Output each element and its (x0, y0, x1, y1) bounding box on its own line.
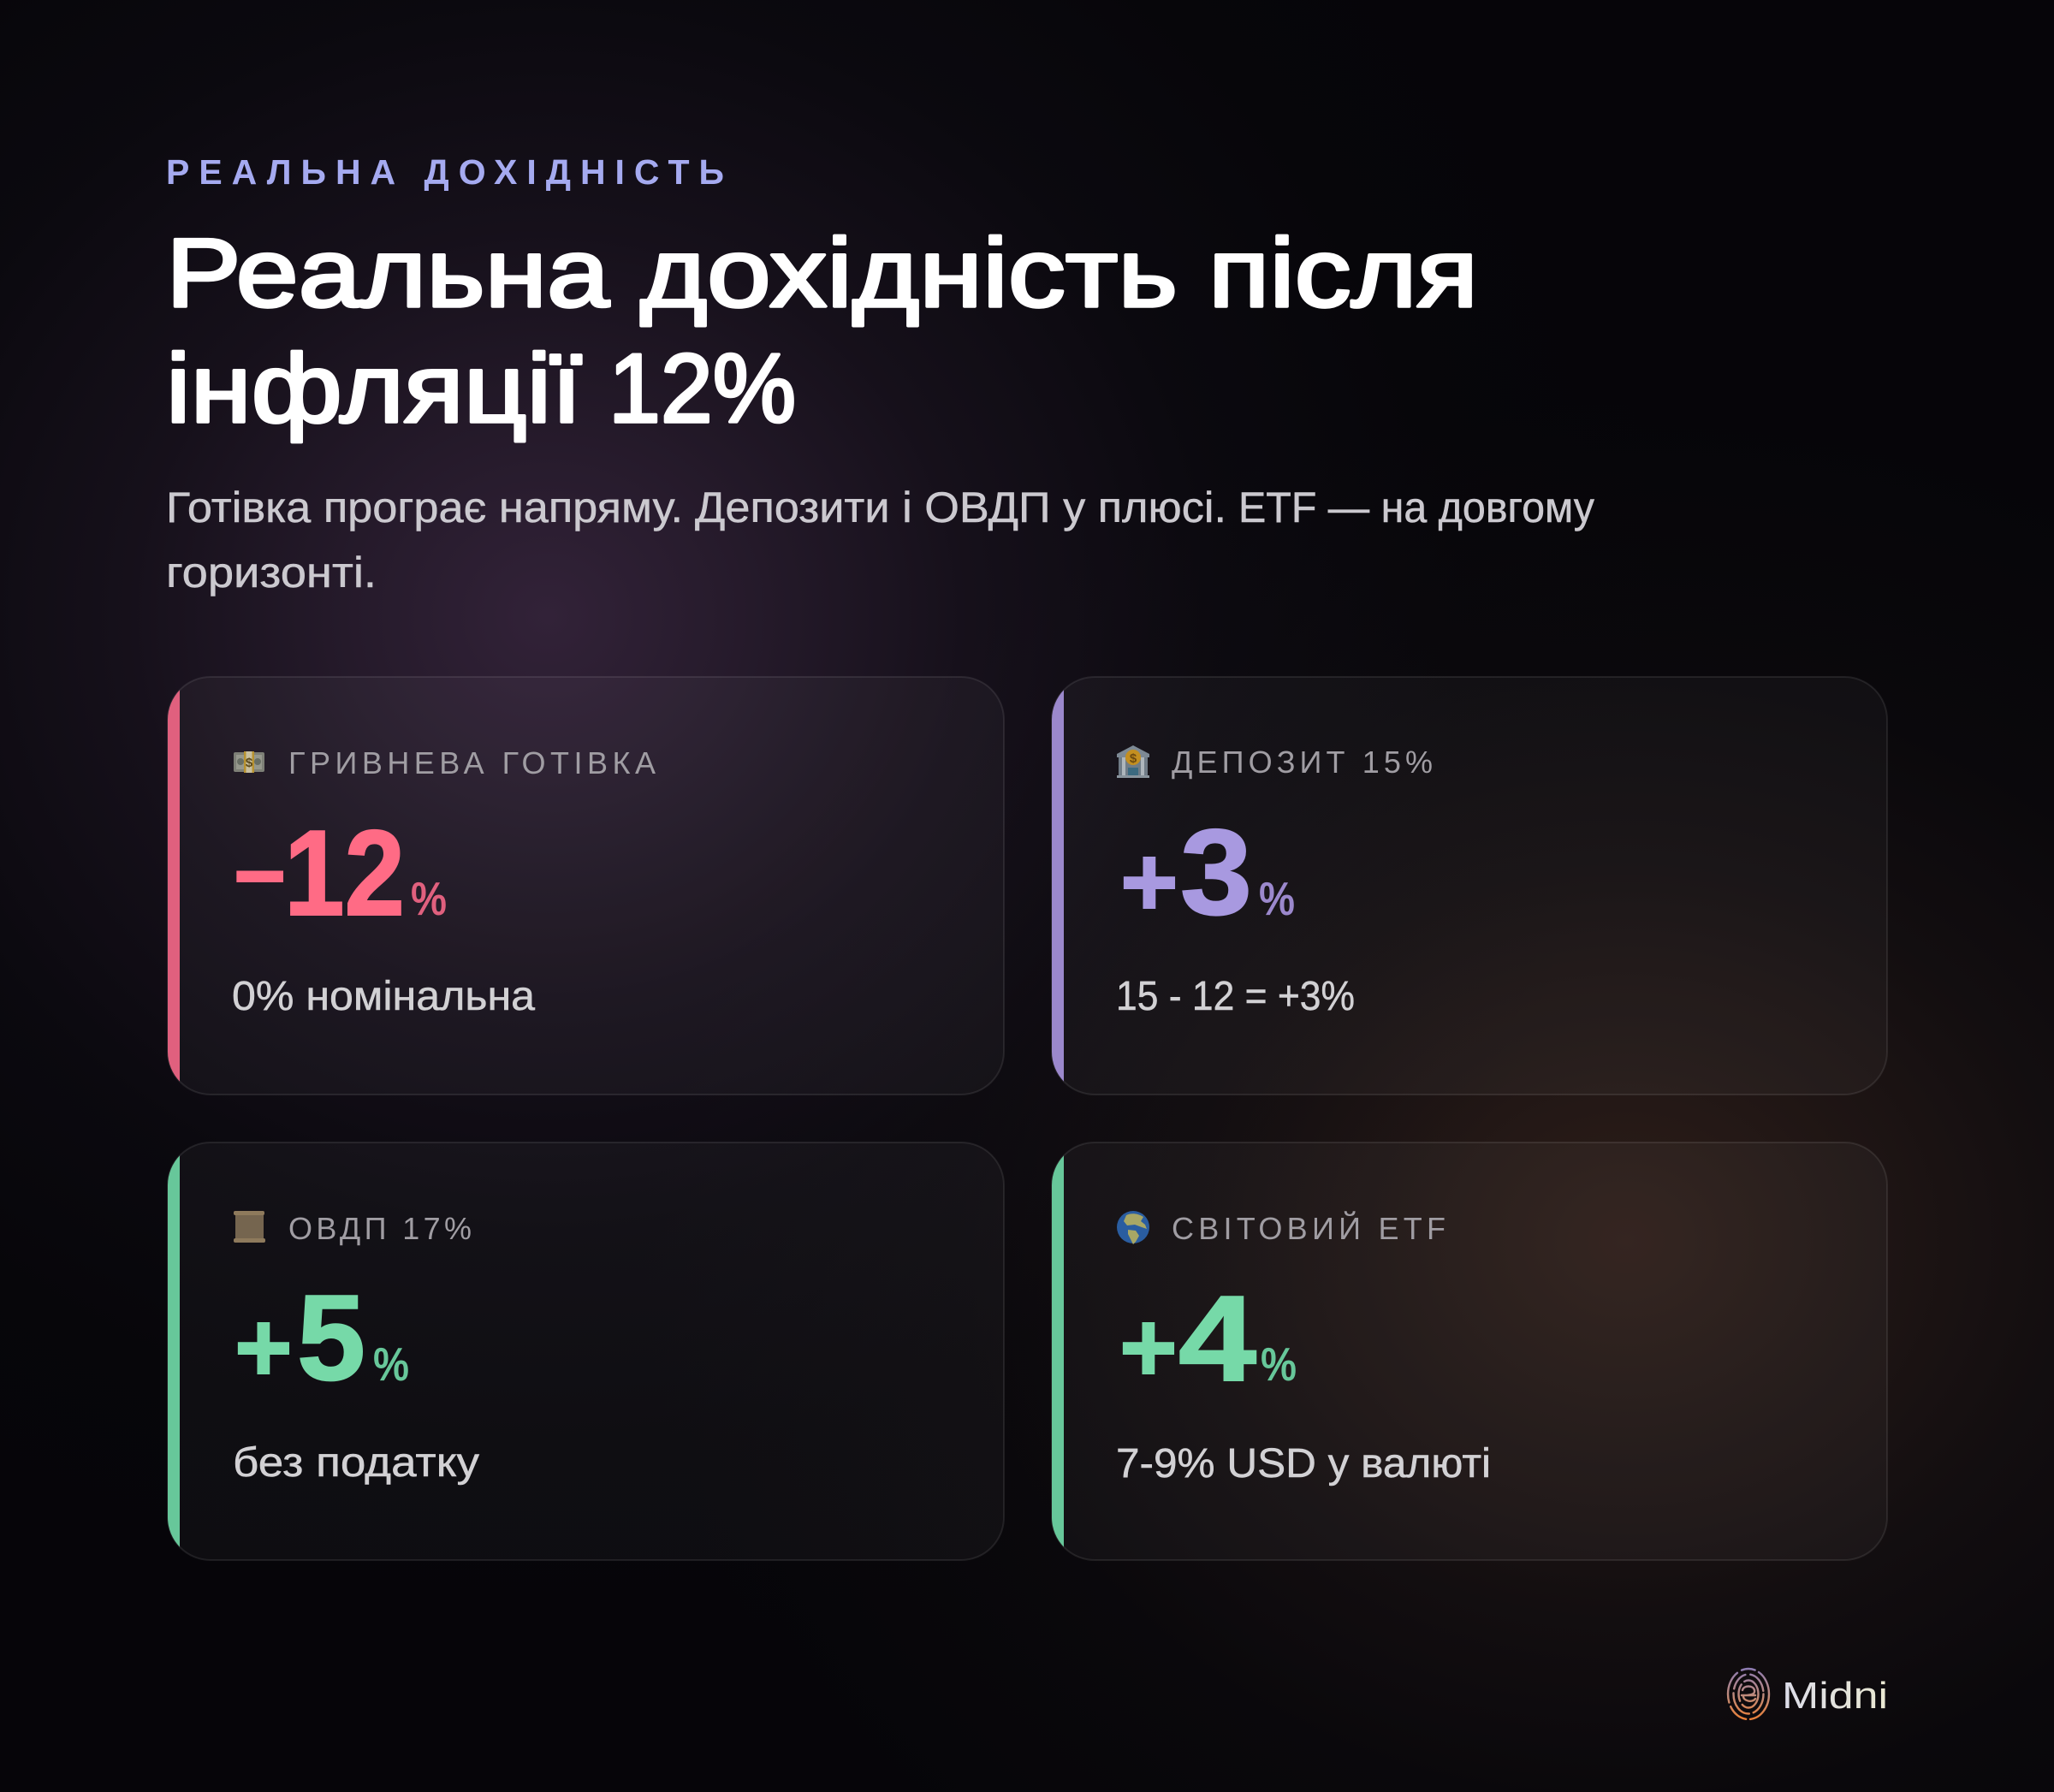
value (1119, 1271, 1297, 1407)
title: 12% (608, 335, 796, 443)
title: дохідність (640, 219, 1178, 328)
value: 5 (297, 1270, 365, 1406)
value (1120, 804, 1295, 941)
icon: bank: $ (1130, 751, 1137, 766)
value: 12 (284, 805, 405, 941)
value: + (234, 1291, 293, 1403)
icon: fingerprint (1728, 1669, 1769, 1719)
value: 3 (1180, 804, 1252, 941)
value: − (234, 826, 286, 926)
value: + (1119, 1291, 1178, 1403)
panel: депозит (1052, 677, 1887, 1095)
value (234, 1270, 409, 1406)
title: інфляції (166, 335, 582, 443)
description: 15 - 12 = +3% (1116, 974, 1355, 1019)
value: % (373, 1338, 409, 1391)
icon: banknote (234, 751, 264, 773)
panel: овдп (168, 1142, 1004, 1560)
icon: globe (1117, 1211, 1149, 1244)
subtitle: ETF — на довгому (1238, 484, 1594, 531)
accent bar: red (168, 677, 180, 1095)
accent bar: violet (1052, 677, 1064, 1095)
title: після (1208, 219, 1478, 328)
accent bar: green (1052, 1142, 1064, 1560)
subtitle (166, 484, 1594, 596)
label: СВІТОВИЙ ETF (1172, 1210, 1446, 1246)
value: + (1120, 826, 1178, 937)
label: ГРИВНЕВА ГОТІВКА (288, 745, 656, 780)
subtitle: Депозити і ОВДП у плюсі. (695, 484, 1226, 531)
wordmark: Midni (1782, 1675, 1888, 1717)
icon: scroll (234, 1211, 265, 1243)
subtitle: Готівка програє напряму. (166, 484, 683, 531)
value: % (1259, 872, 1295, 925)
description: 7-9% USD у валюті (1116, 1441, 1491, 1486)
panel: гривнева готівка (168, 677, 1004, 1095)
title (166, 219, 1478, 443)
value: % (411, 872, 447, 925)
panel: світовий etf (1052, 1142, 1887, 1560)
value: 4 (1178, 1271, 1256, 1407)
eyebrow label: РЕАЛЬНА ДОХІДНІСТЬ (166, 152, 724, 192)
value (234, 805, 447, 941)
description: без податку (233, 1440, 479, 1486)
icon: banknote: $ (246, 756, 253, 770)
label: ОВДП 17% (288, 1211, 472, 1246)
title: Реальна (166, 219, 610, 328)
logo: Midni (1728, 1669, 1888, 1719)
subtitle: горизонті. (166, 549, 377, 596)
value: % (1261, 1338, 1297, 1391)
description: 0% номінальна (232, 974, 535, 1019)
accent bar: green (168, 1142, 180, 1560)
icon: bank (1117, 745, 1149, 778)
label: ДЕПОЗИТ 15% (1172, 745, 1433, 780)
